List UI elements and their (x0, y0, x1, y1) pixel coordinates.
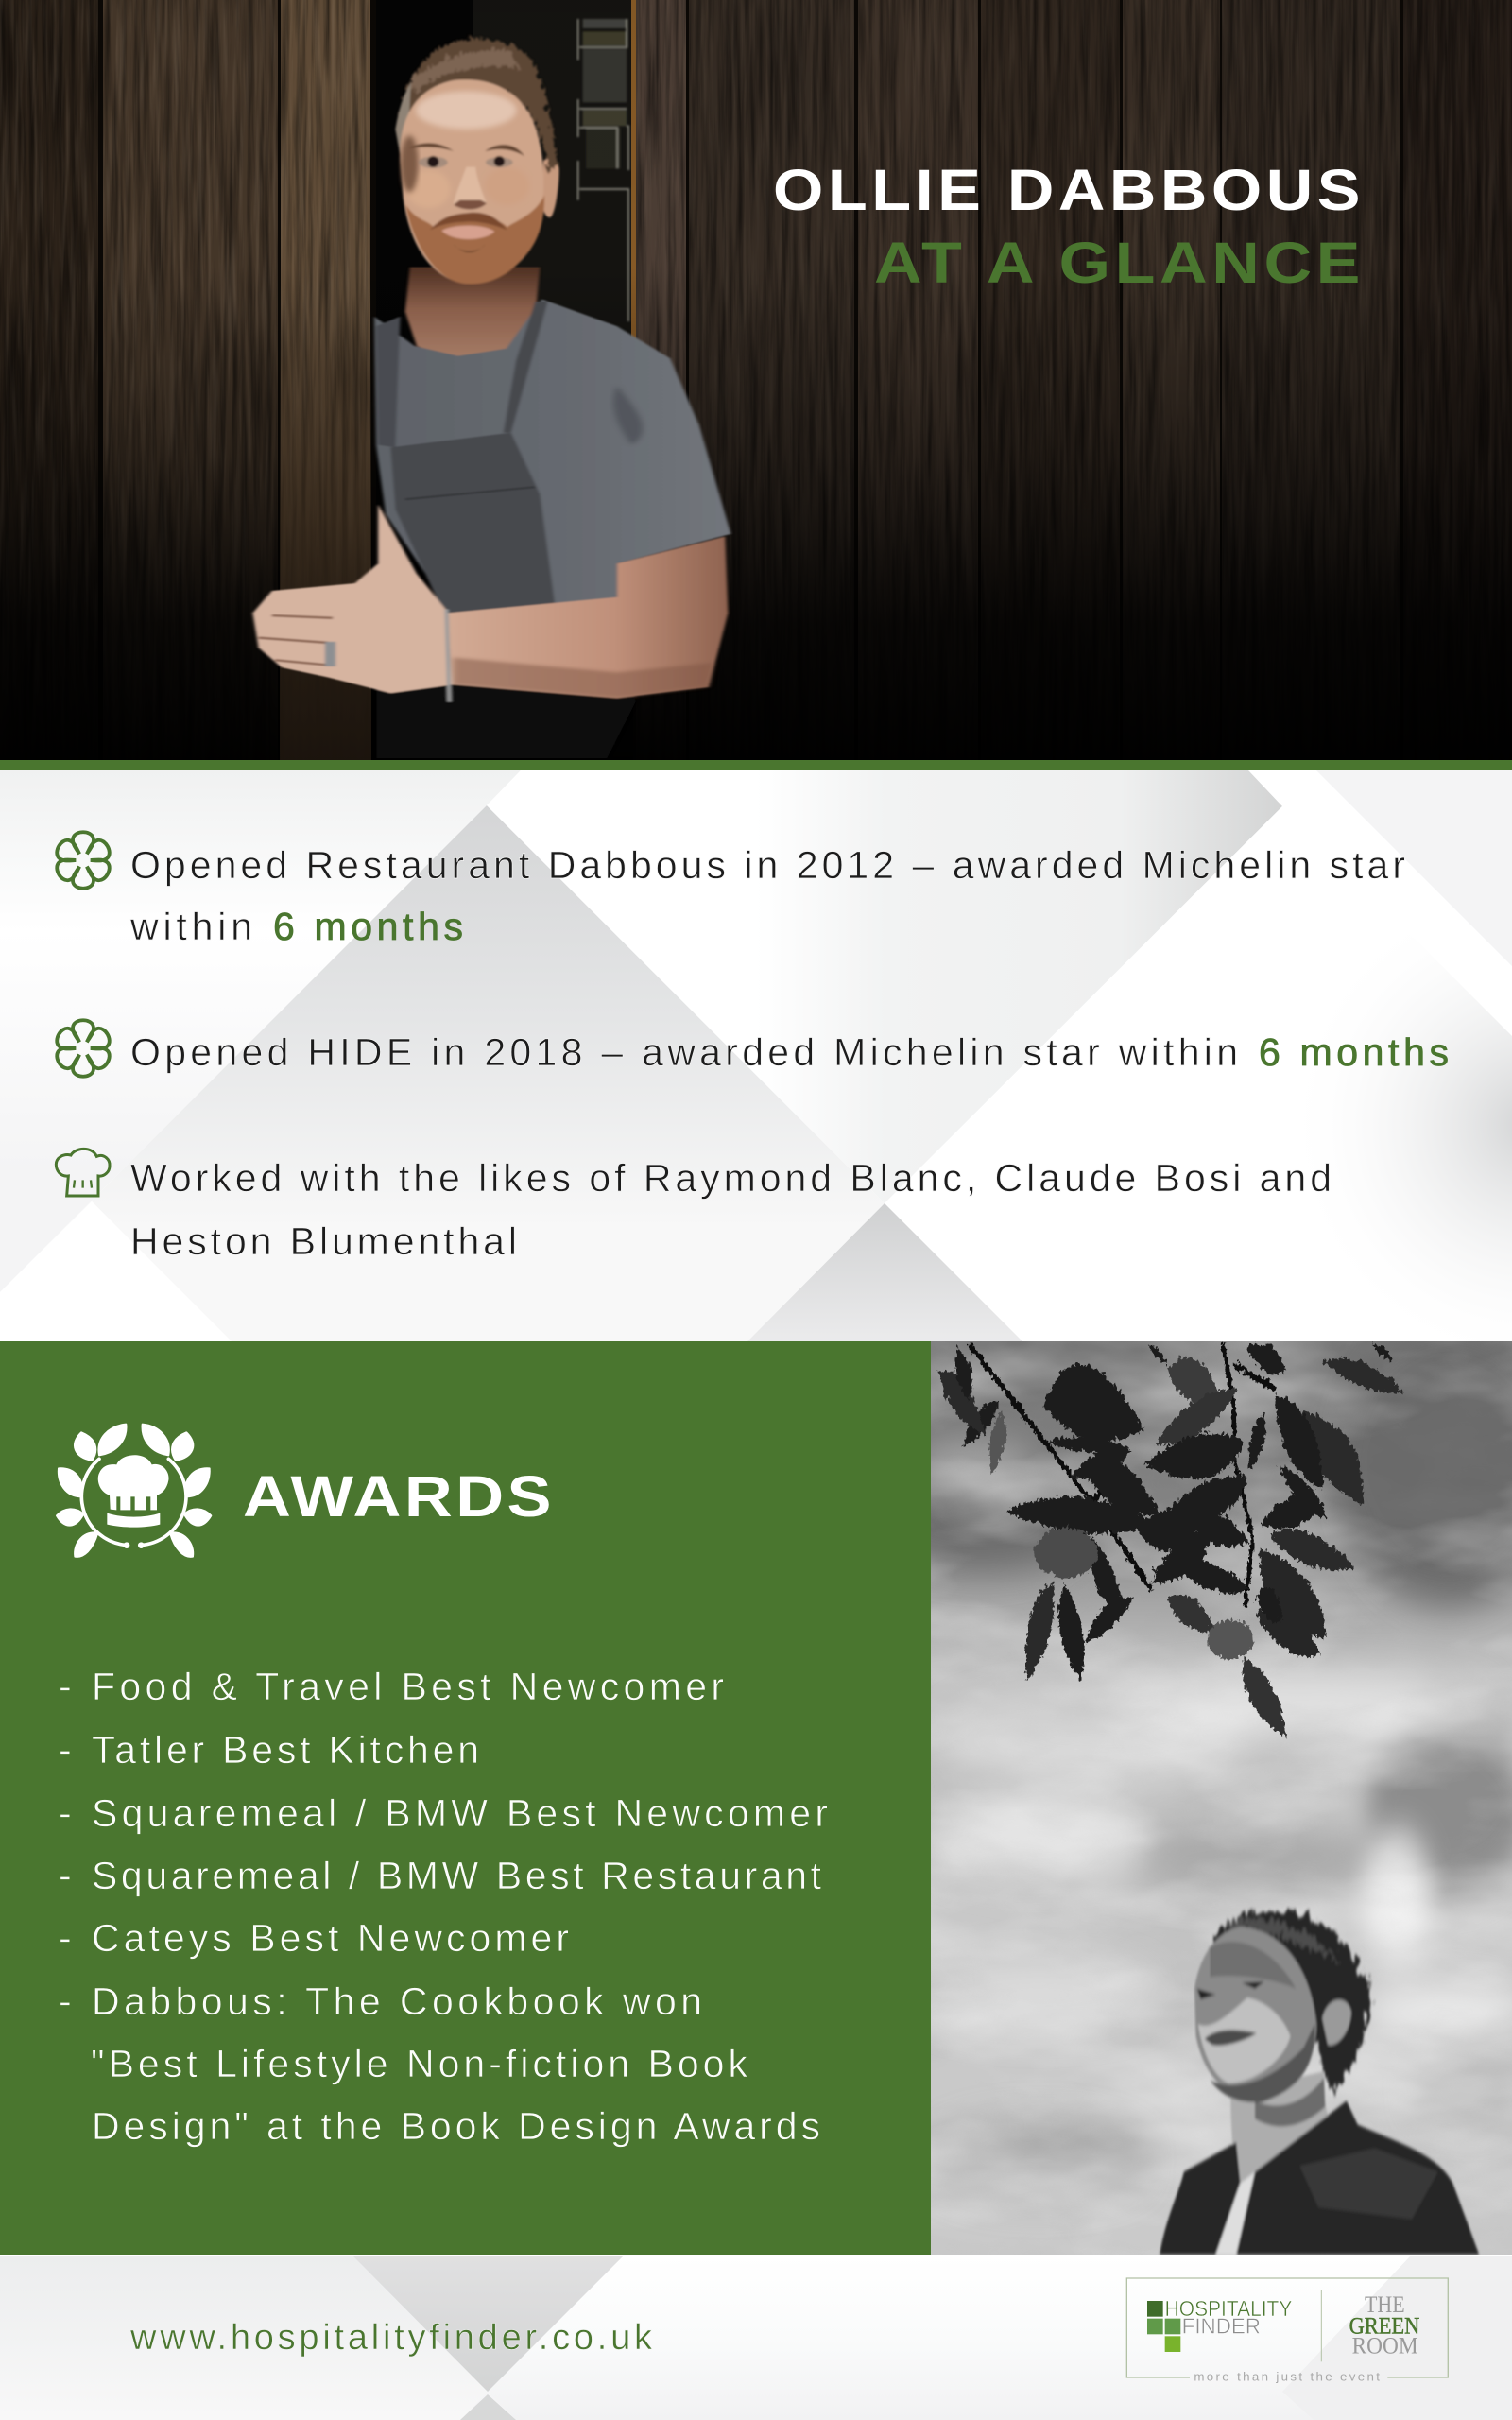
title: OLLIE DABBOUS (773, 158, 1365, 222)
logo: hospitality finder and the green room: ROOM (1352, 2332, 1418, 2359)
awards list: - (59, 1791, 72, 1835)
highlight: HIDE: Opened HIDE in 2018 – awarded Michelin star within (130, 1030, 1238, 1074)
icon: michelin star (54, 832, 112, 889)
logo: hospitality finder and the green room: THE (1365, 2291, 1405, 2318)
chef head (395, 36, 559, 285)
icon: chef hat (56, 1149, 110, 1196)
logo: hospitality finder and the green room: more than just the event (1194, 2369, 1380, 2383)
highlight: worked with (130, 1156, 1332, 1263)
hand (252, 504, 454, 693)
highlight: Restaurant Dabbous: within (129, 905, 252, 948)
awards list: - (59, 1854, 72, 1897)
highlight: Restaurant Dabbous: Opened Restaurant Dabbous in 2012 – awarded Michelin star (130, 843, 1405, 887)
chef body (252, 267, 730, 759)
chef portrait (1160, 1905, 1479, 2255)
heading: awards: AWARDS (243, 1464, 555, 1529)
highlight: HIDE: 6 months (1259, 1030, 1449, 1074)
icon: laurel wreath with chef hat (57, 1425, 211, 1557)
highlight: Restaurant Dabbous (129, 843, 1405, 948)
logo: hospitality finder and the green room: HOSPITALITY (1165, 2296, 1293, 2321)
highlight: worked with: Worked with the likes of Raymond Blanc, Claude Bosi and (130, 1156, 1332, 1200)
nose and eyes (454, 166, 486, 204)
awards list: "Best Lifestyle Non-fiction Book (91, 2042, 748, 2085)
awards list: - (59, 1665, 72, 1708)
photo: chef under chestnut branches (885, 1322, 1512, 2255)
icon: michelin star (54, 1020, 112, 1077)
awards list: Cateys Best Newcomer (92, 1916, 569, 1960)
footer background (0, 2256, 1512, 2420)
clouds (885, 1322, 1512, 2195)
website url: www.hospitalityfinder.co.uk (129, 2318, 653, 2358)
highlight: worked with: Heston Blumenthal (130, 1219, 517, 1263)
awards list: - (59, 1916, 72, 1960)
panel: career highlights (0, 770, 1512, 1341)
logo: hospitality finder and the green room (1126, 2278, 1448, 2383)
awards list: - (59, 1979, 72, 2023)
highlight: Restaurant Dabbous: 6 months (273, 905, 463, 948)
beard (405, 196, 544, 285)
awards list: Squaremeal / BMW Best Restaurant (92, 1854, 822, 1897)
awards list: - (59, 1728, 72, 1772)
awards list: Food & Travel Best Newcomer (92, 1665, 724, 1708)
logo: hospitality finder and the green room: GREEN (1349, 2312, 1419, 2339)
awards list: Tatler Best Kitchen (92, 1728, 479, 1772)
awards list: Squaremeal / BMW Best Newcomer (92, 1791, 828, 1835)
hero photo: chef at wooden door (0, 0, 1512, 760)
forearm (445, 536, 728, 698)
awards list: Design" at the Book Design Awards (92, 2104, 820, 2148)
title: AT A GLANCE (874, 231, 1365, 295)
awards list (59, 1665, 828, 2148)
green divider strip (0, 760, 1512, 770)
title (775, 169, 1358, 284)
logo: hospitality finder and the green room: FINDER (1182, 2314, 1261, 2339)
plank gaps (98, 0, 1403, 644)
awards list: Dabbous: The Cookbook won (92, 1979, 702, 2023)
leaves (937, 1341, 1402, 1735)
panel: awards (0, 1341, 931, 2255)
geometric background (0, 770, 1512, 1341)
door hardware (578, 19, 628, 321)
panel: footer (0, 2256, 1512, 2420)
